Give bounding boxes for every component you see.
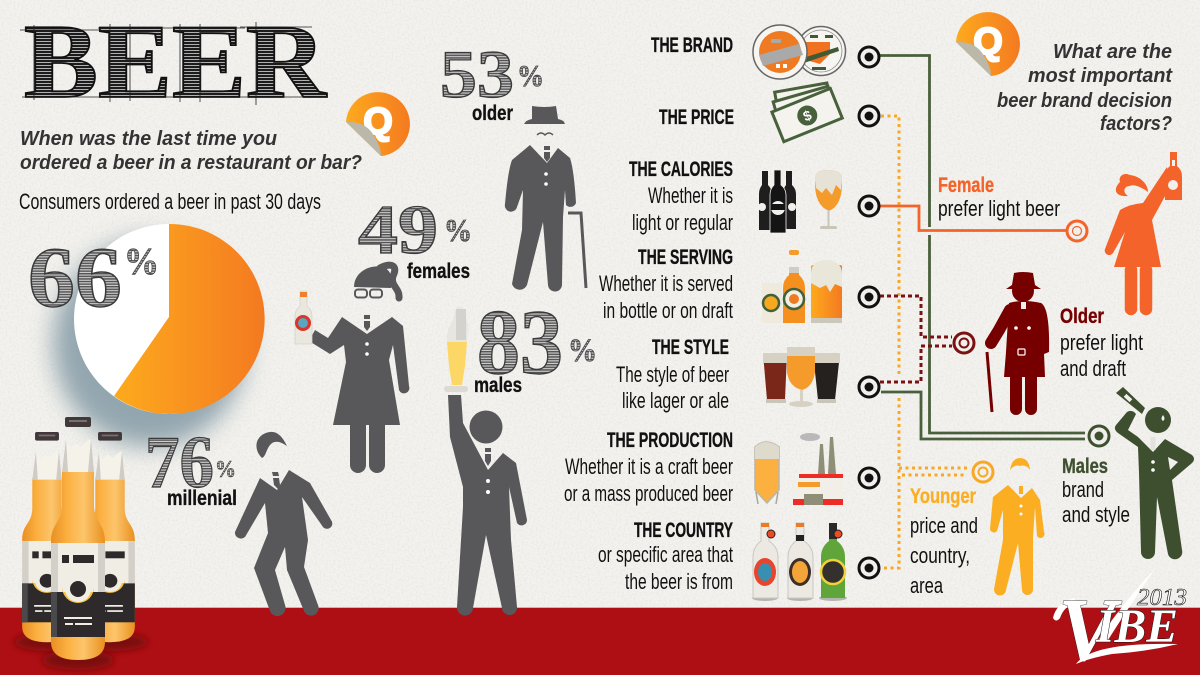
younger label bbox=[910, 485, 978, 598]
node: serving bbox=[859, 287, 879, 307]
icon: can, bottle and mug bbox=[762, 250, 842, 323]
older label bbox=[1060, 305, 1143, 381]
figure: green male drinking bbox=[1115, 387, 1194, 559]
logo: Vibe 2013: 2013 bbox=[1137, 585, 1187, 611]
label: the brand: THE BRAND bbox=[651, 34, 733, 57]
stat: 49% females: females bbox=[407, 260, 470, 283]
figure: yellow younger bbox=[990, 458, 1045, 596]
connector: style to males bbox=[881, 392, 1085, 439]
red floor band bbox=[0, 607, 1200, 675]
label: the style: like lager or ale bbox=[622, 388, 729, 413]
node: brand bbox=[859, 47, 879, 67]
icon: brew tank and factory bbox=[755, 433, 843, 505]
label: the country bbox=[598, 519, 733, 594]
question text left: When was the last time you bbox=[20, 128, 277, 150]
question text right: most important bbox=[1028, 65, 1173, 87]
stat: 49% females bbox=[358, 192, 472, 283]
connector: brand to males bbox=[880, 56, 1085, 433]
label: the country: or specific area that bbox=[598, 542, 733, 567]
stat: 53% older: % bbox=[517, 58, 544, 93]
stat: 83% males: 83 bbox=[477, 291, 563, 393]
factor nodes bbox=[859, 47, 879, 578]
connector lines bbox=[880, 56, 1085, 568]
logo: Vibe 2013: IBE bbox=[1095, 600, 1178, 653]
older label: and draft bbox=[1060, 356, 1126, 381]
stat: 76% millenial: millenial bbox=[167, 487, 237, 510]
label: the serving: in bottle or on draft bbox=[603, 298, 733, 323]
stat: 76% millenial: % bbox=[215, 457, 236, 483]
bottles group bbox=[14, 417, 148, 670]
stat: 53% older: older bbox=[472, 102, 513, 125]
label: the style: THE STYLE bbox=[652, 336, 729, 359]
label: the calories: Whether it is bbox=[648, 183, 733, 208]
older label: prefer light bbox=[1060, 330, 1143, 355]
question text right bbox=[997, 41, 1173, 135]
label: the production bbox=[564, 429, 733, 506]
question sticker right: Q bbox=[973, 21, 1003, 63]
stat: 76% millenial: 76 bbox=[145, 422, 214, 504]
males label: Males bbox=[1062, 455, 1108, 478]
icon: small bottle bbox=[295, 291, 312, 344]
figure: female grey with bottle bbox=[295, 265, 409, 465]
icon: three country bottles bbox=[752, 523, 847, 601]
label: the country: the beer is from bbox=[625, 569, 733, 594]
figure: male grey raising glass bbox=[444, 307, 527, 616]
icon: three beer glasses bbox=[763, 347, 840, 407]
stat: 83% males: males bbox=[474, 374, 522, 397]
female label: Female bbox=[938, 174, 994, 197]
younger label: Younger bbox=[910, 485, 976, 508]
label: the production: Whether it is a craft beer bbox=[565, 454, 733, 479]
question text right: What are the bbox=[1053, 41, 1172, 63]
question text right: factors? bbox=[1100, 113, 1172, 135]
label: the production: or a mass produced beer bbox=[564, 481, 733, 506]
question text left: ordered a beer in a restaurant or bar? bbox=[20, 152, 362, 174]
older label: Older bbox=[1060, 305, 1104, 328]
connector: price and country to younger bbox=[881, 116, 967, 568]
node: female bbox=[1067, 221, 1087, 241]
question sticker left bbox=[346, 92, 410, 156]
label: the serving: Whether it is served bbox=[599, 271, 733, 296]
logo: Vibe 2013 bbox=[1053, 569, 1187, 675]
stat: 49% females: 49 bbox=[358, 192, 438, 269]
connector: serving and style to older bbox=[880, 296, 952, 382]
label: the style bbox=[616, 336, 729, 413]
stat: 53% older: 53 bbox=[440, 36, 514, 112]
factor labels bbox=[564, 34, 734, 594]
figure: older man grey bbox=[505, 106, 586, 292]
female label: prefer light beer bbox=[938, 196, 1060, 221]
66 percent label bbox=[28, 229, 159, 325]
question text right: beer brand decision bbox=[997, 90, 1172, 112]
label: the calories: THE CALORIES bbox=[629, 158, 733, 181]
label: the calories: light or regular bbox=[632, 210, 733, 235]
stat: 83% males: % bbox=[568, 333, 597, 369]
subtitle: Consumers ordered a beer in past 30 days bbox=[19, 189, 321, 214]
66 percent label: % bbox=[124, 241, 159, 283]
question text left bbox=[20, 128, 362, 174]
label: the price: THE PRICE bbox=[659, 106, 734, 129]
node: calories bbox=[859, 196, 879, 216]
node: price bbox=[859, 106, 879, 126]
icon: brand coasters bbox=[753, 25, 846, 79]
node: production bbox=[859, 468, 879, 488]
stat: 53% older bbox=[440, 36, 544, 125]
icon: bottles and tulip glass bbox=[758, 170, 842, 233]
figure: orange female with bottle bbox=[1105, 152, 1182, 309]
pie white slice bbox=[74, 224, 264, 414]
pie orange slice bbox=[114, 224, 265, 414]
males label: brand bbox=[1062, 477, 1104, 502]
icon: raised bottle bbox=[1165, 152, 1182, 200]
icon: money: $ bbox=[801, 107, 814, 124]
icon: beer glass bbox=[444, 307, 468, 392]
title: BEER: BEER bbox=[24, 3, 328, 120]
icon: money bbox=[763, 70, 844, 144]
stat: 49% females: % bbox=[444, 212, 472, 248]
males label: and style bbox=[1062, 502, 1130, 527]
label: the serving bbox=[599, 246, 733, 323]
younger label: country, bbox=[910, 543, 970, 568]
label: the style: The style of beer bbox=[616, 362, 729, 387]
node: younger bbox=[973, 462, 993, 482]
node: style bbox=[859, 377, 879, 397]
label: the country: THE COUNTRY bbox=[634, 519, 733, 542]
figure: millenial dancing grey bbox=[235, 432, 332, 616]
younger label: price and bbox=[910, 513, 978, 538]
node: older bbox=[954, 333, 974, 353]
pie chart 66% bbox=[28, 224, 265, 447]
question sticker right bbox=[956, 12, 1020, 76]
label: the calories bbox=[629, 158, 733, 235]
66 percent label: 66 bbox=[28, 229, 122, 325]
label: the serving: THE SERVING bbox=[638, 246, 733, 269]
node: males bbox=[1089, 426, 1109, 446]
connector: calories to female bbox=[880, 206, 1066, 230]
younger label: area bbox=[910, 573, 944, 598]
figure: older dark red bbox=[987, 272, 1049, 412]
pie shadow bbox=[53, 239, 247, 447]
question sticker left: Q bbox=[363, 101, 393, 143]
males label bbox=[1062, 455, 1130, 527]
female label bbox=[938, 174, 1060, 221]
node: country bbox=[859, 558, 879, 578]
label: the production: THE PRODUCTION bbox=[607, 429, 733, 452]
